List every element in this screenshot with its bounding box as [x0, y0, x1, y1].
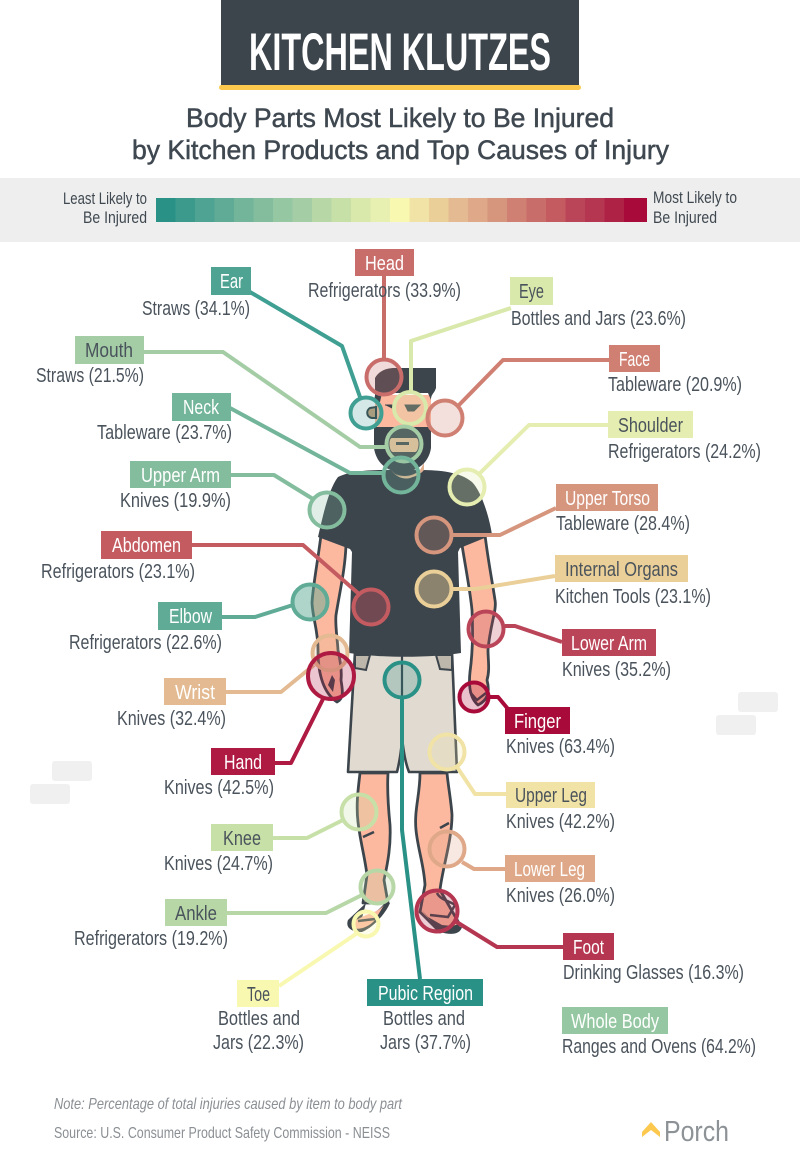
label: Head: Refrigerators (33.9%): [308, 280, 461, 302]
label: Finger: Knives (63.4%): [506, 736, 615, 758]
label: Toe: [213, 912, 378, 1054]
label: Internal Organs: Kitchen Tools (23.1%): [555, 586, 711, 608]
label: Pubic Region: Bottles and: [383, 1008, 465, 1030]
shorts: [348, 652, 457, 772]
label: Ear: Ear: [220, 271, 243, 293]
decorative clouds: [30, 692, 778, 804]
label: Toe: Jars (22.3%): [213, 1032, 304, 1054]
label: Internal Organs: Internal Organs: [565, 559, 678, 581]
legend band: Be Injured: [653, 208, 717, 227]
label: Eye: Eye: [519, 281, 544, 303]
label: Lower Arm: Lower Arm: [571, 633, 647, 655]
note: Note: Percentage of total injuries caused by item to body part: [54, 1096, 402, 1113]
shirt: [318, 470, 492, 657]
label: Pubic Region: Pubic Region: [378, 983, 473, 1005]
label: Upper Torso: Upper Torso: [565, 488, 650, 510]
legend band: Be Injured: [83, 208, 147, 227]
label: Upper Torso: Tableware (28.4%): [556, 513, 690, 535]
legend band: [0, 178, 800, 242]
subtitle: by Kitchen Products and Top Causes of Injury: [132, 135, 669, 165]
label: Abdomen: [41, 531, 388, 624]
logo: Porch: Porch: [664, 1116, 729, 1148]
label: Lower Leg: Knives (26.0%): [506, 885, 615, 907]
label: Hand: Hand: [224, 752, 262, 774]
label: Elbow: Elbow: [169, 606, 212, 628]
label: Upper Leg: Upper Leg: [515, 785, 587, 807]
label: Toe: Toe: [247, 984, 270, 1006]
label: Head: [308, 249, 461, 394]
title banner: KITCHEN KLUTZES: [249, 23, 551, 82]
label: Pubic Region: Jars (37.7%): [380, 1032, 471, 1054]
legend band: Least Likely to: [63, 189, 147, 208]
label: Mouth: Mouth: [85, 340, 133, 362]
label: Ankle: Ankle: [175, 903, 217, 925]
head: [367, 368, 436, 479]
label: Lower Arm: Knives (35.2%): [562, 659, 671, 681]
label: Upper Leg: [430, 734, 615, 833]
label: Ear: Straws (34.1%): [142, 298, 250, 320]
label: Foot: [416, 890, 744, 984]
label: Whole Body: Whole Body: [571, 1011, 659, 1033]
label: Face: [428, 345, 742, 436]
neck: [391, 463, 424, 478]
label: Wrist: [117, 636, 348, 730]
subtitle: Body Parts Most Likely to Be Injured: [186, 103, 614, 133]
label: Hand: Knives (42.5%): [164, 777, 274, 799]
legs: [357, 773, 460, 932]
label: Mouth: Straws (21.5%): [36, 365, 144, 387]
label: Ankle: [74, 870, 394, 950]
label: Upper Leg: Knives (42.2%): [506, 811, 615, 833]
legend band: Most Likely to: [653, 188, 737, 207]
label: Upper Torso: [416, 484, 690, 552]
label: Shoulder: Refrigerators (24.2%): [608, 441, 761, 463]
label: Abdomen: Abdomen: [112, 535, 181, 557]
label: Lower Leg: Lower Leg: [514, 859, 585, 881]
label: Head: Head: [365, 253, 404, 275]
source: Source: U.S. Consumer Product Safety Commission - NEISS: [54, 1125, 390, 1142]
label: Lower Leg: [430, 832, 615, 907]
label: Neck: Neck: [183, 397, 220, 419]
label: Shoulder: Shoulder: [618, 415, 683, 437]
logo: Porch: [642, 1116, 729, 1148]
label: Hand: [164, 653, 354, 799]
label: Eye: Bottles and Jars (23.6%): [511, 308, 686, 330]
illustration: man: [312, 368, 495, 934]
label: Wrist: Wrist: [175, 682, 215, 704]
subtitle: [132, 103, 669, 165]
label: Elbow: [69, 584, 328, 654]
label: Ear: [142, 267, 382, 428]
label: Elbow: Refrigerators (22.6%): [69, 632, 222, 654]
label: Upper Arm: Knives (19.9%): [120, 490, 231, 512]
label: Upper Arm: Upper Arm: [141, 465, 220, 487]
label: Wrist: Knives (32.4%): [117, 708, 226, 730]
label: Pubic Region: [367, 662, 483, 1054]
label: Neck: [97, 393, 418, 492]
label: Lower Arm: [468, 612, 671, 681]
label: Knee: Knee: [223, 828, 261, 850]
label: Shoulder: [450, 411, 761, 504]
title banner: [219, 0, 581, 90]
sandals: [347, 893, 462, 934]
label: Face: Tableware (20.9%): [608, 374, 742, 396]
label: Whole Body: [562, 1007, 756, 1058]
label: Mouth: [36, 336, 422, 462]
label: Upper Arm: [120, 461, 344, 528]
label: Ankle: Refrigerators (19.2%): [74, 928, 228, 950]
label: Neck: Tableware (23.7%): [97, 422, 232, 444]
label: Finger: Finger: [514, 711, 561, 733]
label: Knee: Knives (24.7%): [164, 853, 273, 875]
label: Face: Face: [619, 349, 650, 371]
label: Eye: [394, 277, 686, 424]
label: Foot: Foot: [573, 937, 604, 959]
arms: [312, 535, 495, 705]
label: Finger: [460, 682, 615, 758]
label: Knee: [164, 794, 376, 875]
label: Toe: Bottles and: [218, 1008, 300, 1030]
label: Foot: Drinking Glasses (16.3%): [563, 962, 744, 984]
label: Internal Organs: [416, 555, 711, 608]
label: Abdomen: Refrigerators (23.1%): [41, 561, 195, 583]
